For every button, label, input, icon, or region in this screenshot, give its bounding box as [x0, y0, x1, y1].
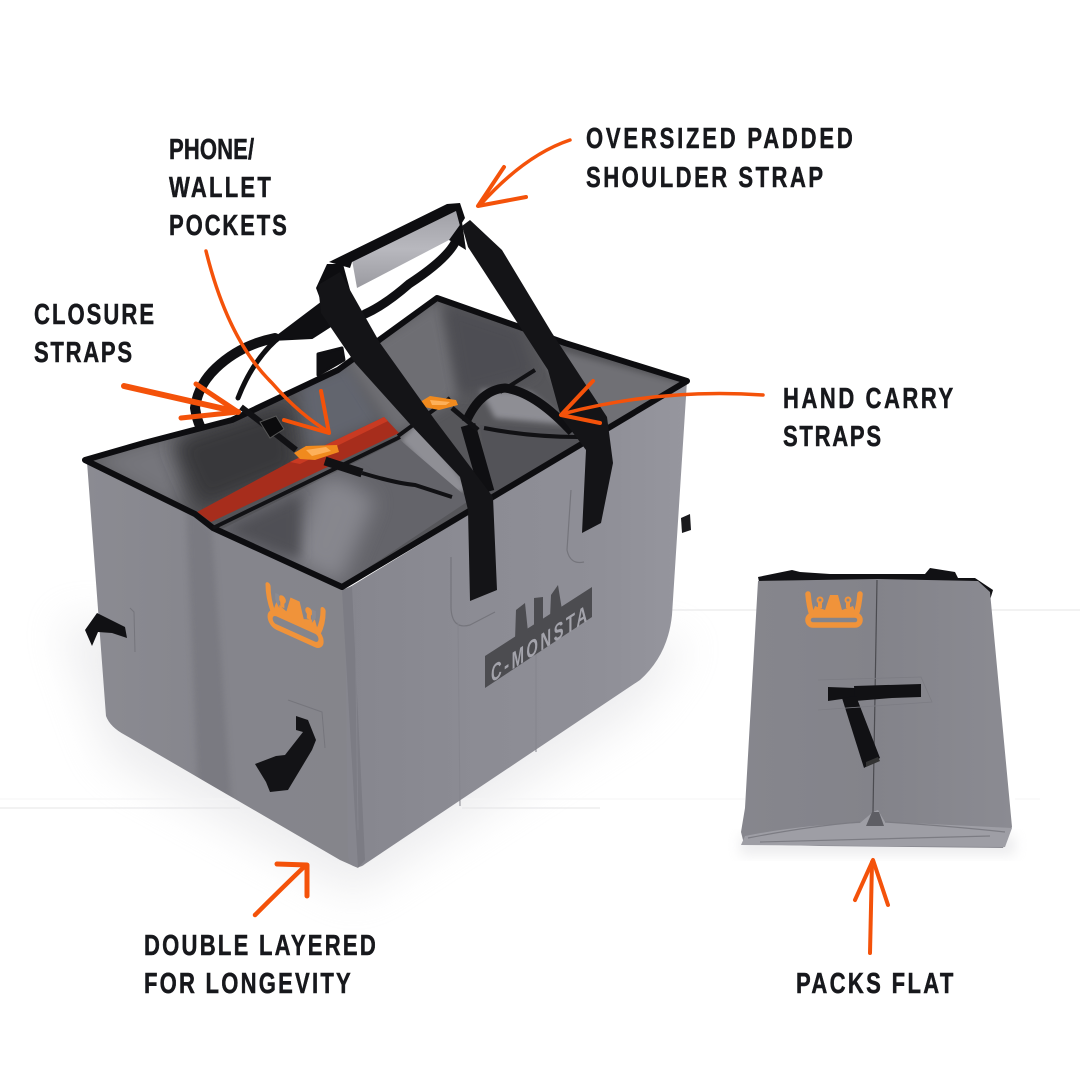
- closure strap with buckles: [241, 396, 578, 497]
- label: hand carry straps: STRAPS: [783, 421, 881, 453]
- arrow: packs flat: [855, 860, 888, 953]
- right face: [345, 381, 687, 867]
- ground shadows and floor lines: [0, 610, 1080, 895]
- label: closure straps: CLOSURE: [34, 299, 154, 331]
- rim binding: [85, 298, 687, 587]
- label: double layered for longevity: [144, 930, 376, 1000]
- arrow: shoulder strap: [478, 140, 570, 206]
- arrow: double layered: [255, 864, 307, 915]
- front long strap: [318, 272, 497, 601]
- bag interior: [80, 290, 690, 590]
- flat strap and buckle: [818, 677, 932, 768]
- C-MONSTA logo: C-MONSTA: [491, 601, 587, 689]
- red phone and wallet pocket panel: [197, 417, 399, 522]
- corner seam and fold shading: [130, 490, 584, 868]
- flat packed bag: [741, 568, 1012, 848]
- label: oversized padded shoulder strap: OVERSIZED PADDED: [586, 123, 853, 155]
- side buckle right: [681, 514, 691, 533]
- crown logo on side: [268, 585, 323, 648]
- left face: [87, 462, 358, 868]
- shoulder strap padded handle: [316, 203, 466, 312]
- label: packs flat: PACKS FLAT: [796, 968, 954, 1000]
- main bag: [80, 203, 691, 868]
- label: closure straps: [34, 299, 154, 369]
- arrow: closure straps: [124, 384, 238, 418]
- side buckle left: [85, 613, 127, 646]
- label: double layered for longevity: DOUBLE LAYERED: [144, 930, 376, 962]
- arrow: hand carry straps: [561, 381, 763, 423]
- label: phone/wallet pockets: [169, 134, 287, 242]
- label: double layered for longevity: FOR LONGEVITY: [144, 968, 351, 1000]
- label: hand carry straps: [783, 383, 953, 453]
- arrow: phone pockets: [206, 251, 329, 433]
- back strap behind bag: [195, 232, 458, 426]
- label: phone/wallet pockets: WALLET: [169, 172, 271, 204]
- hand carry strap loop: [466, 388, 572, 492]
- label: oversized padded shoulder strap: [586, 123, 853, 194]
- label: phone/wallet pockets: PHONE/: [169, 134, 254, 166]
- label: closure straps: STRAPS: [34, 337, 132, 369]
- crown logo flat: [808, 594, 860, 625]
- side buckle front: [255, 716, 316, 792]
- rear long strap: [462, 220, 613, 533]
- label: hand carry straps: HAND CARRY: [783, 383, 953, 415]
- label: oversized padded shoulder strap: SHOULDER STRAP: [586, 162, 823, 194]
- label: phone/wallet pockets: POCKETS: [169, 210, 287, 242]
